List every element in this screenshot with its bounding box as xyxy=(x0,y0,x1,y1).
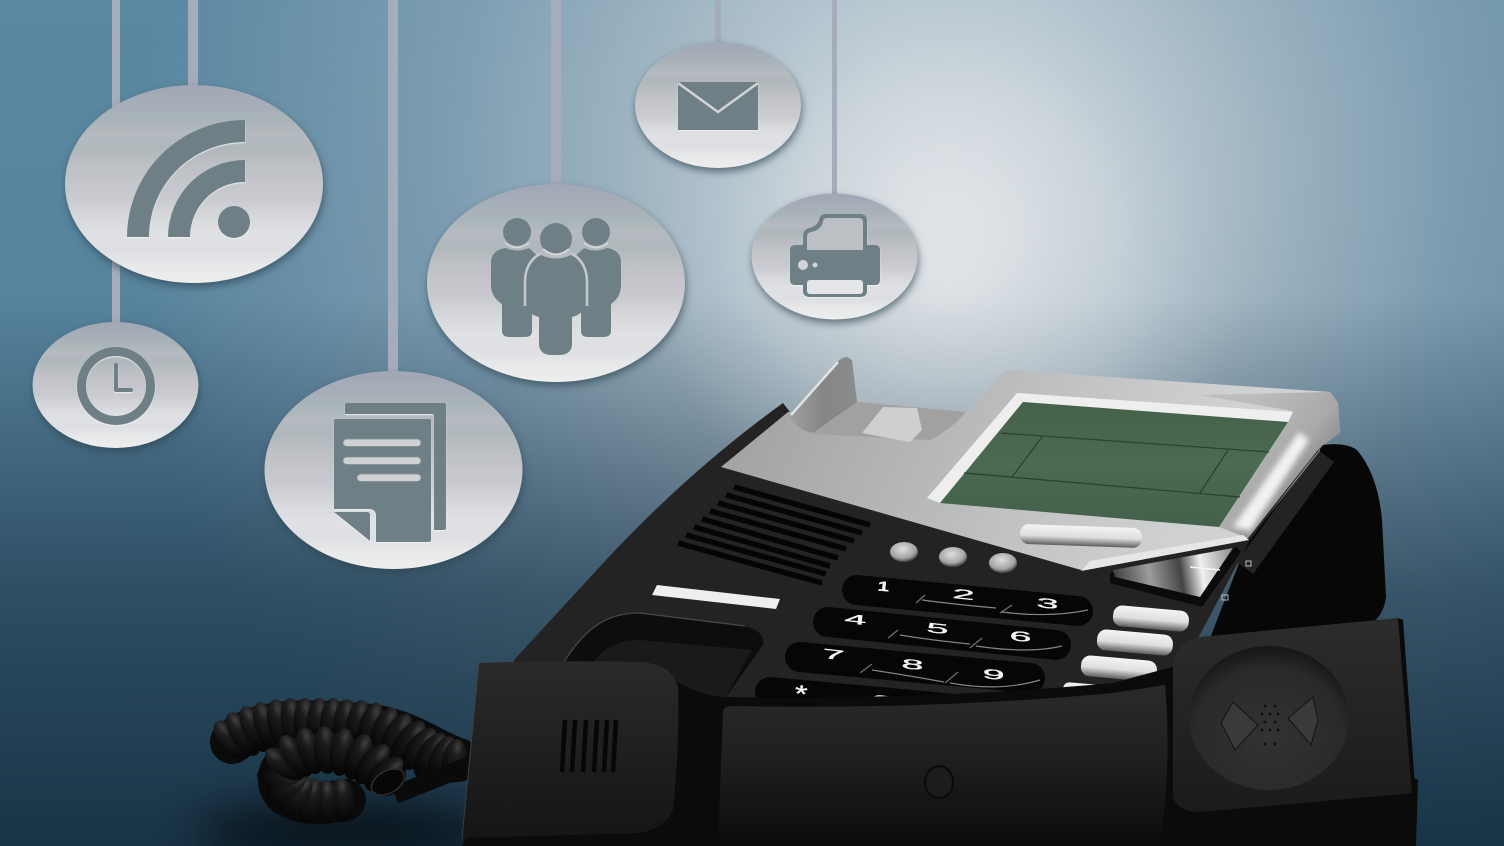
function buttons xyxy=(1062,605,1190,700)
round buttons xyxy=(890,542,1017,573)
handset rest recess xyxy=(560,613,763,700)
soft key bar xyxy=(1020,524,1142,548)
keypad: 6 xyxy=(1009,628,1032,645)
lower coil xyxy=(257,724,409,826)
rocker key xyxy=(1110,547,1251,607)
keypad: 8 xyxy=(901,656,924,673)
keypad: 5 xyxy=(926,620,949,637)
silver top panel xyxy=(721,370,1340,570)
keypad: 4 xyxy=(844,611,867,628)
rear handset cradle xyxy=(1190,444,1386,690)
signal glyph xyxy=(127,120,250,238)
documents glyph xyxy=(334,403,446,542)
icon disc: printer xyxy=(752,194,918,320)
handset face xyxy=(718,685,1168,846)
handset cradle hook xyxy=(790,357,966,442)
floor shadow xyxy=(195,804,495,846)
keypad: 7 xyxy=(822,646,845,663)
keypad: 0 xyxy=(871,692,894,709)
handset earpiece xyxy=(462,661,678,838)
cord end ring xyxy=(367,763,409,801)
hanging strings xyxy=(112,0,837,376)
telephone xyxy=(462,357,1418,846)
tip highlight xyxy=(1081,535,1249,571)
cable to handset xyxy=(395,765,470,795)
right silver section xyxy=(1200,392,1340,538)
icon disc: RSS signal xyxy=(65,85,323,283)
display frame xyxy=(927,393,1293,503)
keypad: * xyxy=(793,681,809,708)
microphone hole xyxy=(925,766,953,798)
speaker grille xyxy=(678,487,870,583)
icon disc: mail xyxy=(635,42,801,168)
people glyph xyxy=(491,218,621,355)
keypad: 9 xyxy=(982,666,1005,683)
upper coil xyxy=(207,697,470,786)
coiled cord xyxy=(207,697,470,826)
mouthpiece diamonds xyxy=(1221,697,1318,750)
earpiece vents xyxy=(562,720,616,772)
keypad xyxy=(770,578,1088,714)
keypad: 3 xyxy=(1036,595,1059,612)
label strip xyxy=(652,585,780,609)
envelope glyph xyxy=(678,82,758,130)
keypad: 1 xyxy=(877,578,890,595)
icon disc: clock xyxy=(32,322,198,448)
handset mouthpiece xyxy=(1173,618,1416,812)
handset bar rim xyxy=(462,662,1418,846)
keypad: 2 xyxy=(952,586,975,603)
icon disc: people xyxy=(427,184,685,382)
frame highlight band xyxy=(1233,432,1309,531)
mouthpiece perforations xyxy=(1260,704,1280,746)
phone base xyxy=(514,403,1320,730)
printer glyph xyxy=(790,214,880,297)
clock glyph xyxy=(82,352,150,420)
display screen xyxy=(940,402,1288,527)
icon disc: documents xyxy=(264,371,522,569)
